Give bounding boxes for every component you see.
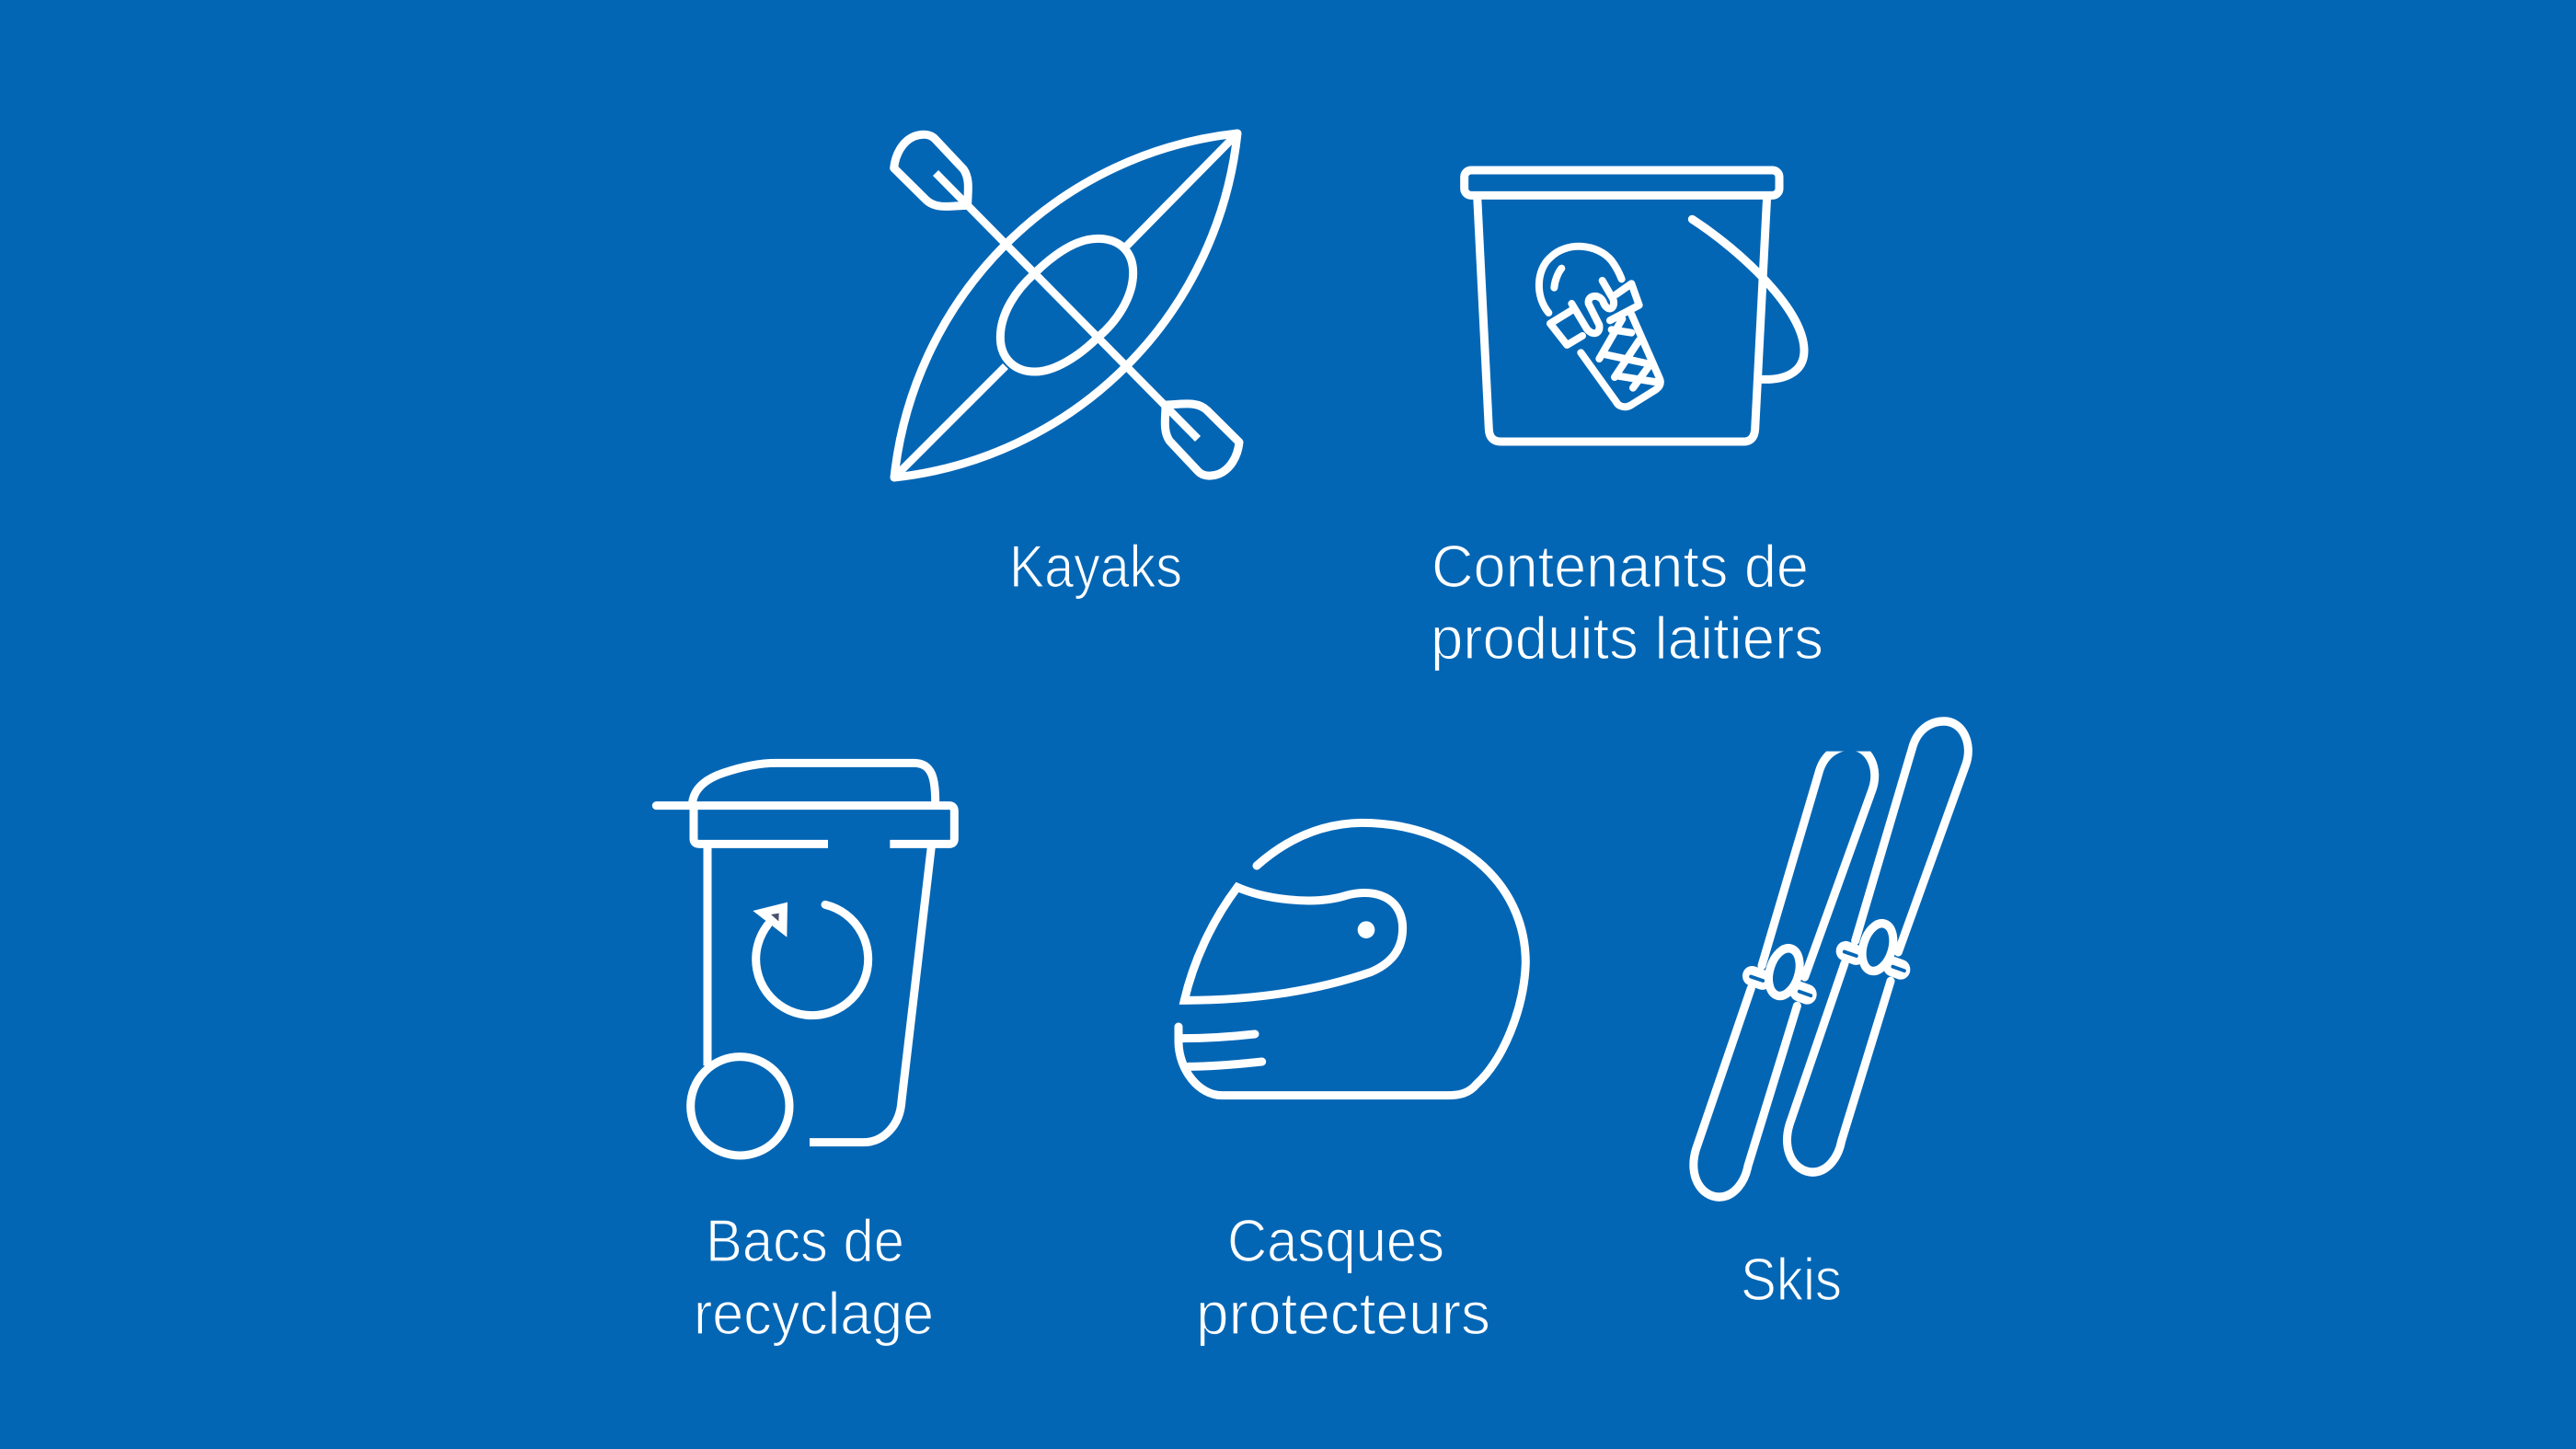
label: Casques protecteurs: protecteurs <box>1196 1280 1490 1347</box>
label: Kayaks: Kayaks <box>1009 533 1182 600</box>
label: Contenants de produits laitiers <box>1431 533 1823 672</box>
icon: ice cream tub <box>1465 170 1804 442</box>
label: Bacs de recyclage: recyclage <box>694 1280 934 1347</box>
label: Bacs de recyclage: Bacs de <box>706 1207 904 1274</box>
panel: recycling bins <box>656 763 954 1347</box>
label: Bacs de recyclage <box>694 1207 934 1347</box>
label: Casques protecteurs: Casques <box>1227 1207 1444 1274</box>
label: Contenants de produits laitiers: produits laitiers <box>1431 604 1823 672</box>
icon: kayak with paddle <box>894 133 1239 477</box>
panel: skis <box>1694 721 1968 1313</box>
panel: dairy containers <box>1431 170 1823 672</box>
panel: helmets <box>1179 822 1525 1347</box>
icon: wheeled recycling bin <box>656 763 954 1156</box>
icon: pair of skis <box>1694 721 1968 1197</box>
label: Skis: Skis <box>1741 1246 1842 1313</box>
icon: protective helmet <box>1179 822 1525 1096</box>
label: Casques protecteurs <box>1196 1207 1490 1347</box>
panel: kayaks <box>894 133 1239 600</box>
label: Contenants de produits laitiers: Contenants de <box>1432 533 1809 600</box>
